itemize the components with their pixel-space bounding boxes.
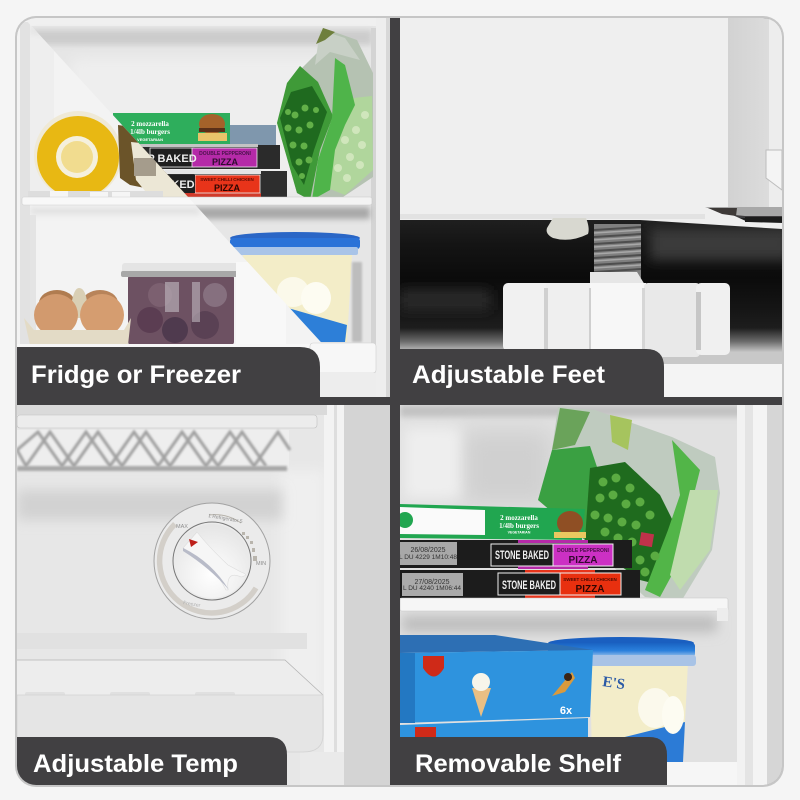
burger box: 1/4lb burgers	[130, 128, 170, 136]
floor	[664, 364, 782, 397]
label: adjustable feet	[400, 349, 664, 397]
grapes container	[121, 263, 242, 345]
packet and label	[118, 125, 192, 197]
label: fridge or freezer	[17, 347, 320, 397]
pizza box 2: SWEET CHILLI CHICKEN	[200, 177, 254, 182]
freezer shelf	[188, 196, 372, 206]
right door frame	[324, 405, 390, 785]
label: adjustable temp: Adjustable Temp	[33, 750, 238, 778]
label: adjustable temp	[17, 737, 287, 785]
pizza box 1: L DU 4229 1M10:48	[399, 554, 457, 561]
screw cap	[547, 218, 589, 240]
ice cream tub	[230, 232, 362, 342]
frozen blue box	[230, 125, 276, 145]
pizza box 1: P BAKED	[147, 153, 197, 165]
panel: fridge or freezer	[17, 18, 390, 397]
wall beside tub	[236, 262, 277, 294]
label: removable shelf	[391, 737, 667, 785]
burger box	[113, 113, 230, 144]
burger box: VEGETARIAN	[137, 137, 163, 142]
panel: adjustable feet	[400, 18, 790, 398]
fridge body	[400, 215, 782, 229]
pizza box 1: DOUBLE PEPPERONI	[199, 151, 251, 157]
removable shelf	[400, 598, 728, 621]
temperature dial: MAX	[176, 524, 188, 530]
pizza box 2: L DU 4240 1M06:44	[403, 585, 461, 592]
eggs in carton	[24, 288, 131, 345]
bottom ledge	[310, 342, 376, 373]
pizza box 2: 27/08/2025	[414, 579, 450, 586]
pizza box 1: STONE BAKED	[495, 548, 549, 562]
freezer shadow under shelf	[190, 207, 370, 219]
pea bag	[538, 407, 720, 600]
ice cream box	[400, 635, 593, 740]
pizza box 2: PIZZA	[214, 183, 240, 193]
burger box	[397, 504, 586, 540]
adjustable foot knob	[503, 272, 730, 357]
pizza box 1: PIZZA	[569, 555, 597, 566]
pizza box 2: SWEET CHILLI CHICKEN	[563, 577, 617, 582]
temperature dial	[154, 503, 270, 619]
label: adjustable feet: Adjustable Feet	[412, 361, 606, 389]
fridge shelf	[22, 191, 222, 205]
floor	[667, 762, 737, 785]
label: removable shelf: Removable Shelf	[415, 750, 622, 778]
pizza box 2	[400, 570, 640, 598]
pizza box 1: 26/08/2025	[410, 547, 446, 554]
shelf shadow	[402, 616, 717, 632]
fridge half	[17, 20, 321, 348]
pizza box 1	[399, 540, 632, 569]
pea bag	[277, 28, 373, 200]
burger box: VEGETARIAN	[508, 530, 531, 534]
pizza box 1: DOUBLE PEPPERONI	[557, 548, 609, 554]
temperature dial: 1 Refrigerator 5	[208, 513, 243, 525]
panel: removable shelf	[397, 405, 782, 785]
ice cream tub: E'S	[601, 674, 626, 693]
blurred wire shelf	[17, 405, 327, 520]
burger box: 2 mozzarella	[131, 120, 169, 128]
ice cream tub	[548, 637, 696, 762]
pizza box 2: STONE BAKED	[502, 578, 556, 592]
pizza box 1: PIZZA	[212, 157, 238, 167]
pizza box 2: KED	[171, 179, 195, 191]
burger box: 1/4lb burgers	[499, 522, 539, 530]
pizza box 2	[165, 170, 287, 197]
lower drawer	[17, 633, 323, 752]
burger box: 2 mozzarella	[500, 514, 538, 522]
pizza box 1	[140, 144, 280, 169]
threaded screw	[594, 224, 641, 278]
panel: adjustable temp	[17, 405, 390, 785]
juice carton lid	[34, 111, 120, 191]
label: fridge or freezer: Fridge or Freezer	[31, 361, 241, 389]
pizza box 2: PIZZA	[576, 584, 604, 595]
ice cream box: 6x	[560, 705, 573, 717]
temperature dial: Freezer	[183, 600, 201, 609]
temperature dial: MIN	[256, 561, 266, 567]
fridge side	[705, 18, 782, 222]
